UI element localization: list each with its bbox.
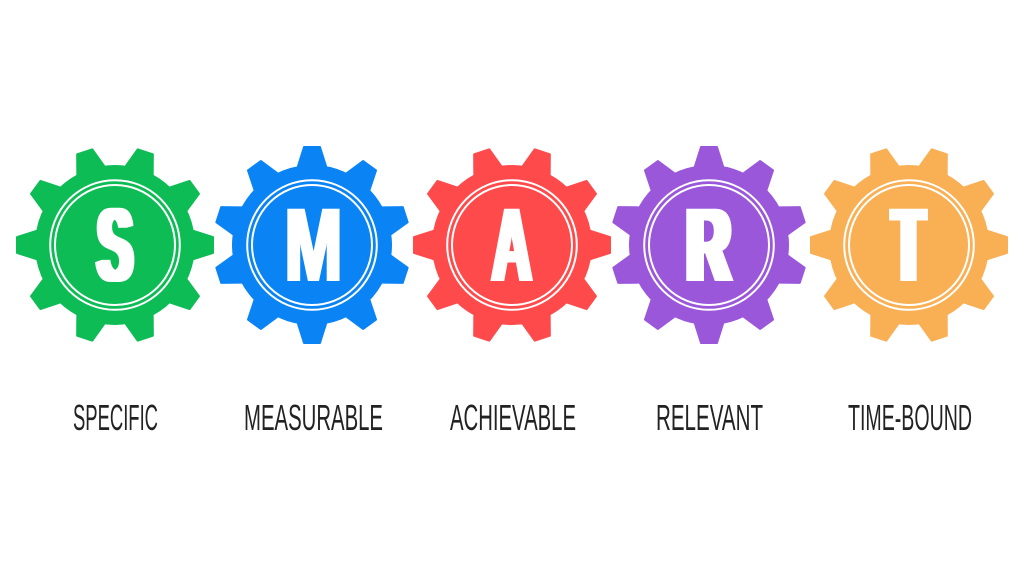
- label: Specific: SPECIFIC: [73, 397, 158, 438]
- double ring: A: [447, 180, 577, 310]
- gear: T (orange): [810, 146, 1008, 344]
- gear body: A: [413, 146, 611, 344]
- gear: S (green): [16, 146, 214, 344]
- double ring: M: [247, 180, 377, 310]
- gear body: R: [584, 120, 834, 370]
- label: Achievable: ACHIEVABLE: [450, 397, 576, 438]
- gear: S (green): S: [98, 187, 132, 304]
- label: Measurable: MEASURABLE: [244, 397, 383, 438]
- letter R: R: [687, 187, 730, 304]
- gear: M (blue): [187, 120, 437, 370]
- double ring: T: [844, 180, 974, 310]
- double ring: R: [644, 180, 774, 310]
- gear body: S: [16, 146, 214, 344]
- gear body: M: [187, 120, 437, 370]
- letter A: A: [492, 187, 532, 304]
- letter M: M: [285, 187, 342, 304]
- gear: T (orange): T: [893, 187, 924, 304]
- gear: A (red): [413, 146, 611, 344]
- gear: R (purple): [584, 120, 834, 370]
- gear body: T: [810, 146, 1008, 344]
- double ring: S: [50, 180, 180, 310]
- label: Relevant: RELEVANT: [656, 397, 763, 438]
